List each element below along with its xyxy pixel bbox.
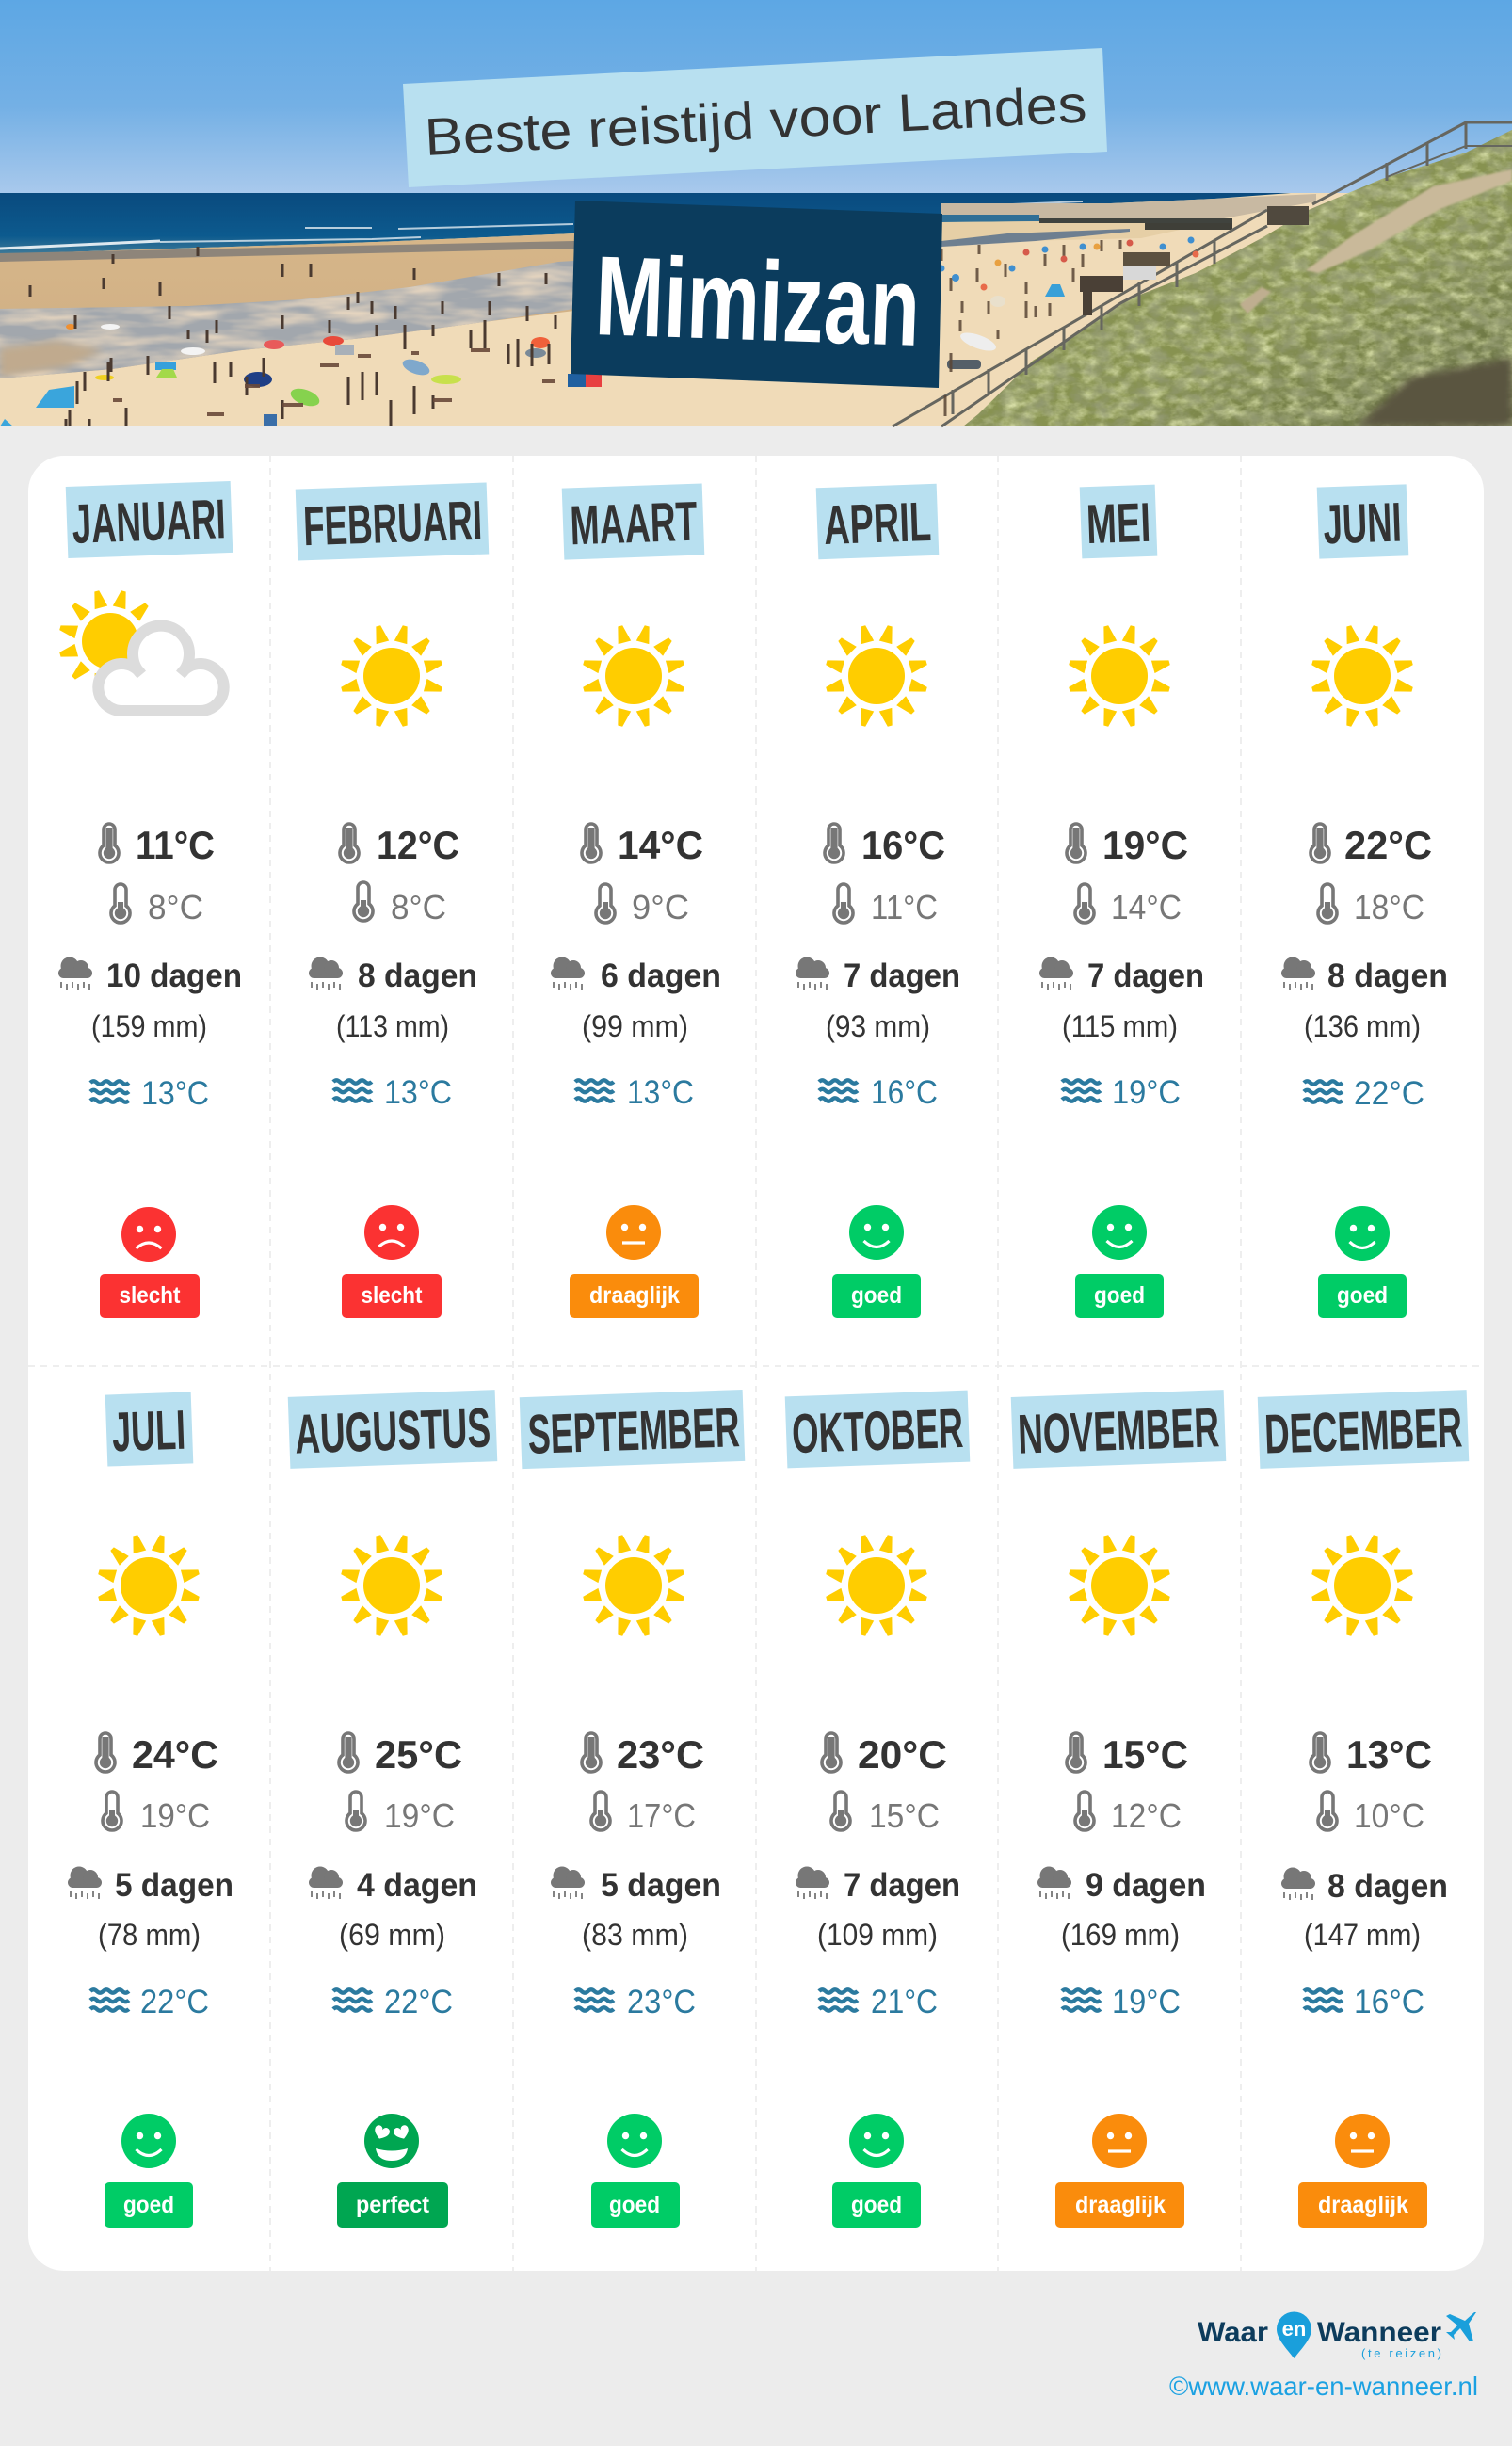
- month: april: (93 mm): [826, 1009, 930, 1043]
- month: oktober: goed: [851, 2192, 902, 2218]
- month: september: (83 mm): [582, 1918, 688, 1952]
- month: mei: MEI: [1086, 491, 1151, 555]
- month: september: [520, 1390, 745, 2228]
- month: maart: 13°C: [627, 1074, 694, 1111]
- month: februari: [296, 482, 489, 1318]
- banner: Mimizan title: [571, 201, 942, 388]
- month: januari: 13°C: [141, 1075, 209, 1112]
- month: mei: goed: [1094, 1282, 1145, 1309]
- month: juli: 5 dagen: [115, 1867, 233, 1904]
- month: maart: 14°C: [618, 823, 703, 867]
- photo detail: dune slope: [941, 122, 1512, 428]
- month: augustus: [288, 1390, 497, 2228]
- month: augustus: (69 mm): [339, 1918, 445, 1952]
- month: november: draaglijk: [1075, 2192, 1166, 2218]
- month: januari: 10 dagen: [106, 957, 242, 994]
- month: maart: (99 mm): [582, 1009, 688, 1043]
- photo detail: beach umbrellas and tents: [0, 324, 602, 426]
- month: juli: [68, 1392, 233, 2228]
- month: december: 13°C: [1346, 1732, 1432, 1777]
- month: september: 5 dagen: [601, 1867, 721, 1904]
- banner: Mimizan title: Mimizan: [593, 233, 923, 370]
- month: april: 16°C: [861, 823, 945, 867]
- month: december: 10°C: [1354, 1796, 1424, 1835]
- month: juli: goed: [123, 2192, 174, 2218]
- month: januari: (159 mm): [91, 1009, 207, 1043]
- month: februari: 8°C: [391, 888, 446, 926]
- month: oktober: 15°C: [869, 1796, 940, 1835]
- banner: subtitle: Beste reistijd voor Landes: [423, 73, 1088, 167]
- month: november: (169 mm): [1061, 1918, 1180, 1952]
- month: oktober: 21°C: [871, 1984, 938, 2020]
- month: september: goed: [609, 2192, 660, 2218]
- month: augustus: 25°C: [375, 1732, 462, 1777]
- month: september: 23°C: [617, 1732, 704, 1777]
- month: juni: [1281, 484, 1448, 1318]
- month: januari: [58, 481, 242, 1318]
- panel: row 1 months: [58, 481, 1448, 1318]
- panel: calendar card: [28, 456, 1484, 2271]
- month: januari: 8°C: [148, 888, 203, 926]
- month: december: 8 dagen: [1327, 1868, 1448, 1905]
- month: september: 23°C: [627, 1984, 696, 2020]
- header photo: beach with dune: [0, 0, 1512, 428]
- month: mei: 19°C: [1112, 1074, 1181, 1111]
- month: november: NOVEMBER: [1017, 1396, 1220, 1466]
- month: juli: (78 mm): [98, 1918, 201, 1952]
- month: juni: 18°C: [1354, 888, 1424, 926]
- month: juni: goed: [1337, 1282, 1388, 1309]
- month: januari: slecht: [119, 1282, 181, 1309]
- photo detail: wooden stairs: [893, 121, 1512, 426]
- month: juni: 22°C: [1354, 1075, 1424, 1112]
- month: augustus: 19°C: [384, 1796, 455, 1835]
- month: augustus: perfect: [356, 2192, 430, 2218]
- month: maart: [551, 483, 721, 1318]
- month: november: [1011, 1390, 1226, 2228]
- month: februari: (113 mm): [336, 1009, 449, 1043]
- month: februari: 8 dagen: [358, 957, 477, 994]
- month: september: 17°C: [627, 1796, 696, 1835]
- month: december: draaglijk: [1318, 2192, 1408, 2218]
- month: november: 15°C: [1102, 1732, 1188, 1777]
- month: juni: 8 dagen: [1327, 957, 1448, 994]
- month: april: [796, 484, 960, 1318]
- month: juli: JULI: [111, 1399, 186, 1463]
- panel: row 2 months: [68, 1390, 1469, 2228]
- month: november: 12°C: [1111, 1796, 1182, 1835]
- month: juli: 24°C: [132, 1732, 218, 1777]
- month: december: 16°C: [1354, 1984, 1424, 2020]
- month: oktober: (109 mm): [817, 1918, 938, 1952]
- month: mei: 14°C: [1111, 888, 1182, 926]
- month: juli: 22°C: [140, 1984, 209, 2020]
- month: juni: 22°C: [1344, 823, 1432, 867]
- logo: Waar en Wanneer: Wanneer: [1317, 2317, 1441, 2348]
- month: september: SEPTEMBER: [526, 1396, 741, 1466]
- month: januari: 11°C: [136, 823, 215, 867]
- month: oktober: [785, 1391, 970, 2228]
- month: april: 16°C: [871, 1074, 938, 1111]
- month: februari: 12°C: [377, 823, 459, 867]
- month: augustus: 4 dagen: [357, 1867, 477, 1904]
- month: mei: (115 mm): [1062, 1009, 1178, 1043]
- month: augustus: AUGUSTUS: [294, 1396, 491, 1466]
- logo: Waar en Wanneer: en: [1282, 2317, 1306, 2341]
- month: februari: 13°C: [384, 1074, 452, 1111]
- month: juni: JUNI: [1322, 491, 1403, 555]
- month: februari: FEBRUARI: [302, 490, 483, 557]
- month: april: 7 dagen: [844, 957, 960, 994]
- website credit: ©www.waar-en-wanneer.nl: [1169, 2372, 1478, 2401]
- month: augustus: 22°C: [384, 1984, 453, 2020]
- month: oktober: 20°C: [858, 1732, 947, 1777]
- logo: Waar en Wanneer: (te reizen): [1361, 2346, 1441, 2360]
- logo: Waar en Wanneer: Waar: [1198, 2317, 1268, 2348]
- month: maart: 6 dagen: [601, 957, 721, 994]
- month: november: 19°C: [1112, 1984, 1181, 2020]
- month: juli: 19°C: [140, 1796, 210, 1835]
- month: maart: draaglijk: [589, 1282, 680, 1309]
- month: mei: 19°C: [1102, 823, 1188, 867]
- month: maart: MAART: [569, 491, 699, 556]
- month: juni: (136 mm): [1304, 1009, 1421, 1043]
- month: april: 11°C: [871, 888, 938, 926]
- month: oktober: OKTOBER: [791, 1397, 964, 1465]
- month: april: APRIL: [823, 491, 932, 556]
- banner: subtitle: [403, 48, 1107, 187]
- photo detail: beach crowd: [30, 247, 555, 426]
- month: april: goed: [851, 1282, 902, 1309]
- month: maart: 9°C: [632, 888, 689, 926]
- month: februari: slecht: [362, 1282, 423, 1309]
- logo: Waar en Wanneer: [1198, 2312, 1476, 2360]
- month: december: (147 mm): [1304, 1918, 1421, 1952]
- month: oktober: 7 dagen: [844, 1867, 960, 1904]
- month: mei: 7 dagen: [1087, 957, 1204, 994]
- month: mei: [1039, 485, 1204, 1318]
- month: januari: JANUARI: [71, 488, 227, 555]
- month: december: [1258, 1390, 1469, 2228]
- month: november: 9 dagen: [1086, 1867, 1206, 1904]
